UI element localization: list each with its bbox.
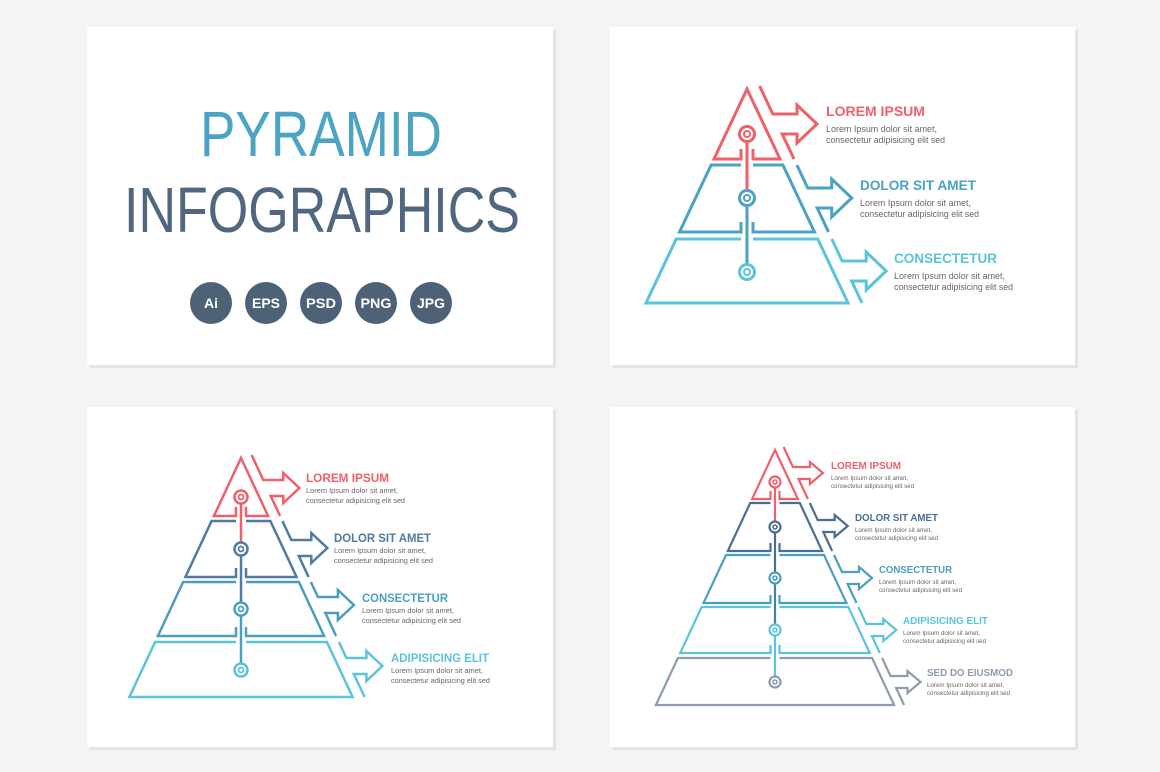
labels: Lorem Ipsum dolor sit amet, [903,630,980,637]
labels: CONSECTETUR [894,250,997,266]
labels [826,103,1013,292]
format badges: PNG [360,295,392,311]
labels: consectetur adipisicing elit sed [927,690,1010,697]
labels: SED DO EIUSMOD [927,668,1013,679]
labels: Lorem Ipsum dolor sit amet, [927,682,1004,689]
pyramid 5 levels [656,447,920,705]
panel: 5-level pyramid [610,407,1078,750]
panel: 3-level pyramid [610,27,1078,368]
labels: LOREM IPSUM [826,103,925,119]
labels: consectetur adipisicing elit sed [826,135,945,145]
labels: Lorem Ipsum dolor sit amet, [879,579,956,586]
labels: Lorem Ipsum dolor sit amet, [362,606,454,615]
labels: consectetur adipisicing elit sed [362,616,461,625]
pyramid 3 levels [646,86,886,303]
labels: Lorem Ipsum dolor sit amet, [831,475,908,482]
labels: Lorem Ipsum dolor sit amet, [894,271,1005,281]
labels [831,461,1013,697]
labels: ADIPISICING ELIT [903,616,988,627]
panel: title card [87,27,556,368]
title: INFOGRAPHICS: INFOGRAPHICS [124,174,520,246]
format badges: Ai [204,295,218,311]
labels: consectetur adipisicing elit sed [391,676,490,685]
labels: DOLOR SIT AMET [855,513,938,524]
labels: consectetur adipisicing elit sed [831,483,914,490]
arrows [784,447,823,499]
format badges: EPS [252,295,280,311]
labels: Lorem Ipsum dolor sit amet, [391,666,483,675]
labels: DOLOR SIT AMET [334,531,432,545]
pyramid 4 levels [129,455,382,697]
arrows [760,86,817,159]
panel: 4-level pyramid [87,407,556,750]
labels: CONSECTETUR [879,565,953,576]
labels: CONSECTETUR [362,591,448,605]
labels: Lorem Ipsum dolor sit amet, [855,527,932,534]
format badges: JPG [417,295,445,311]
labels: consectetur adipisicing elit sed [860,209,979,219]
arrows [252,455,299,516]
labels: Lorem Ipsum dolor sit amet, [826,124,937,134]
labels: consectetur adipisicing elit sed [306,496,405,505]
format badges [190,282,452,324]
labels: LOREM IPSUM [306,471,389,485]
labels: ADIPISICING ELIT [391,651,490,665]
labels: DOLOR SIT AMET [860,177,976,193]
labels: Lorem Ipsum dolor sit amet, [334,546,426,555]
labels: LOREM IPSUM [831,461,901,472]
labels: Lorem Ipsum dolor sit amet, [860,198,971,208]
title: PYRAMID: PYRAMID [200,98,442,170]
labels: consectetur adipisicing elit sed [855,535,938,542]
labels: consectetur adipisicing elit sed [903,638,986,645]
labels: Lorem Ipsum dolor sit amet, [306,486,398,495]
labels: consectetur adipisicing elit sed [334,556,433,565]
labels: consectetur adipisicing elit sed [879,587,962,594]
format badges: PSD [306,295,336,311]
labels [306,471,490,685]
labels: consectetur adipisicing elit sed [894,282,1013,292]
